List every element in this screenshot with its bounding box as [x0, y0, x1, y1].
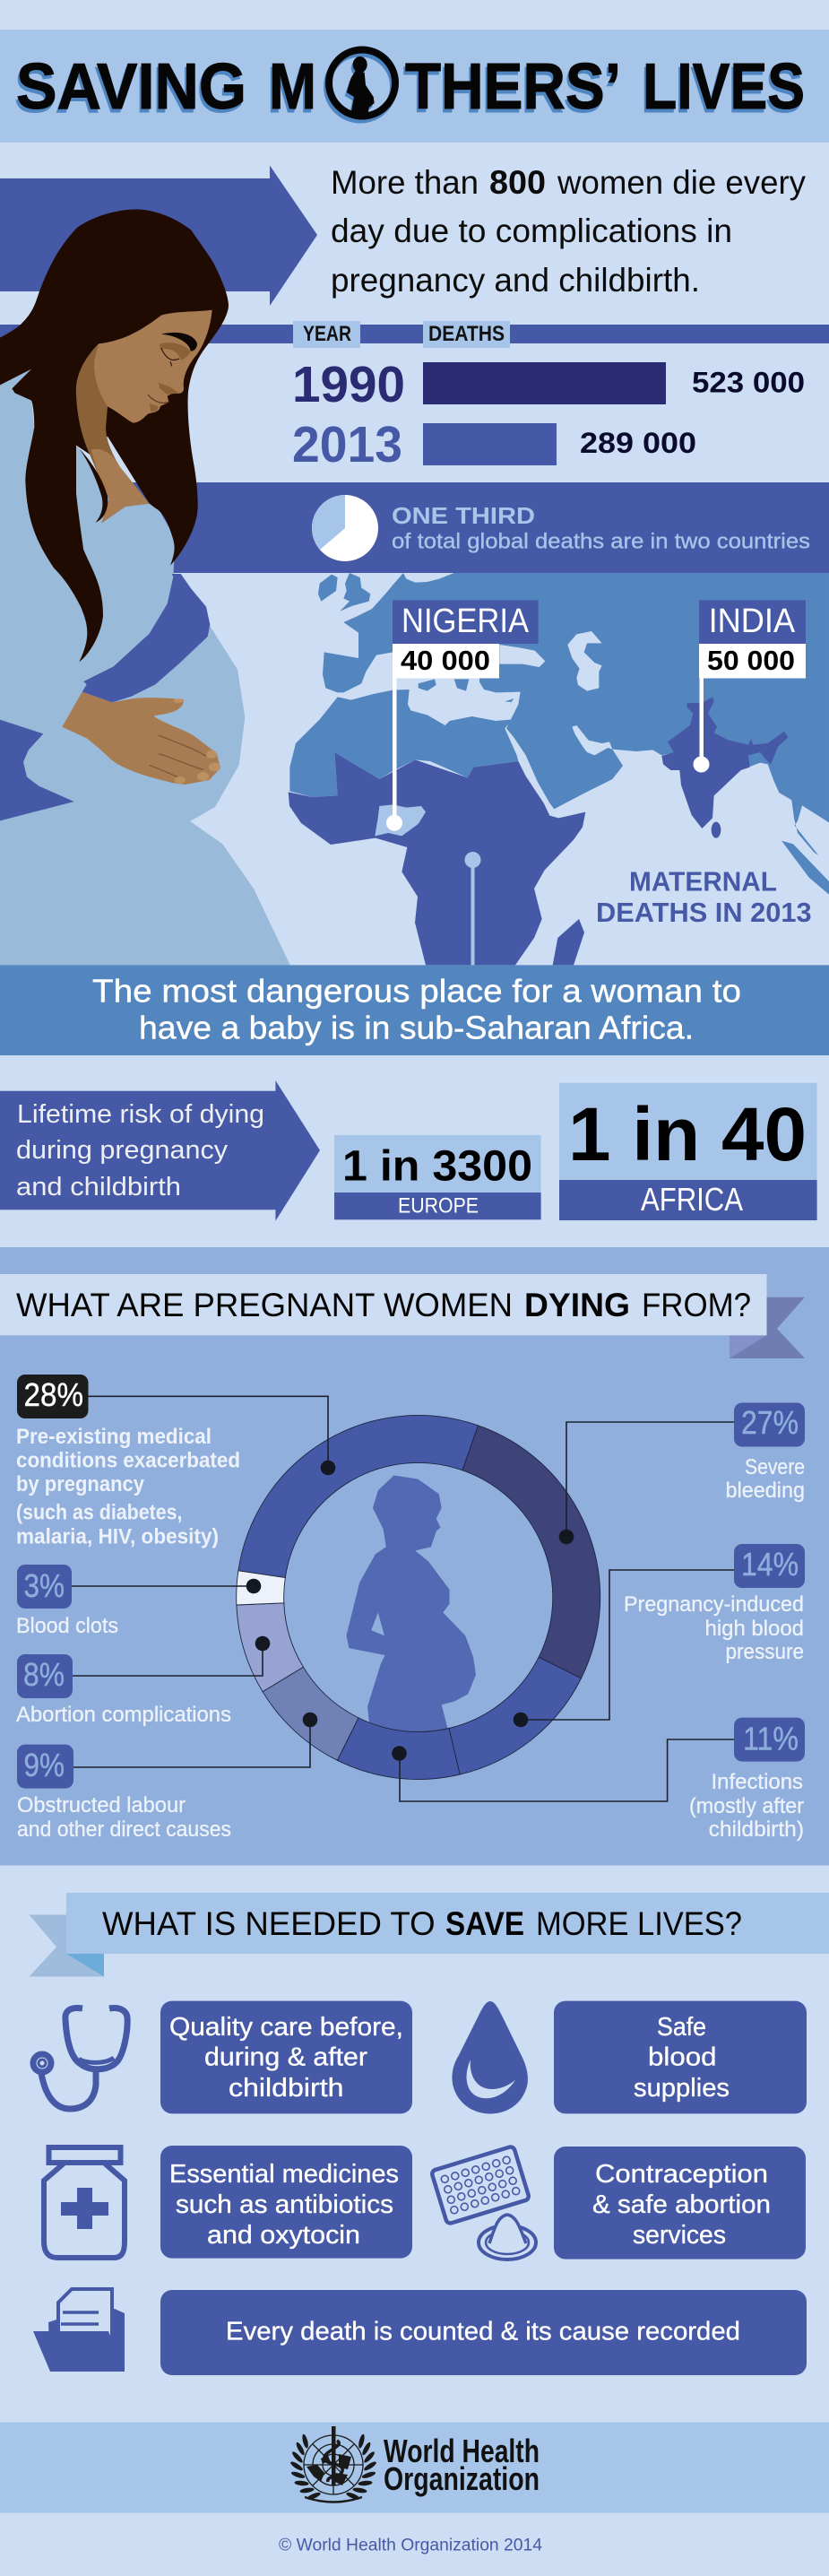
box: safe blood: Safe: [657, 2013, 706, 2042]
box: quality care: Quality care before,: [169, 2013, 403, 2042]
India callout: 50 000: [707, 645, 795, 676]
box: every death counted: [160, 2290, 807, 2375]
hair: [0, 209, 229, 662]
arrow: lifetime risk: Lifetime risk of dying: [17, 1100, 264, 1129]
callout: 14% high blood pressure: [514, 1544, 805, 1727]
British Isles: [318, 573, 370, 611]
Nigeria: [375, 804, 426, 836]
bar chart: deaths 1990 and 2013: [292, 356, 805, 473]
Italy, Greece and Cyprus: [419, 679, 514, 702]
WHO wordmark: World Health: [384, 2433, 540, 2469]
arrow: lifetime risk: during pregnancy: [16, 1136, 229, 1165]
callout: 27% severe bleeding: Severe: [745, 1455, 805, 1479]
icon: contraceptive pills and condom: [431, 2146, 536, 2259]
panel: one third band: [0, 482, 829, 573]
callout: 27% severe bleeding: 27%: [741, 1404, 799, 1441]
hair strand: [79, 448, 108, 523]
callout: 28% pre-existing conditions: malaria, HIV, obesity): [16, 1524, 219, 1548]
callout: 14% high blood pressure: 14%: [741, 1546, 799, 1583]
Sub-Saharan Africa: [289, 752, 585, 965]
callout: 11% infections: Infections: [712, 1770, 803, 1794]
silhouette of pregnant woman: [346, 1476, 476, 1735]
box: every death counted: Every death is counted & its cause recorded: [226, 2317, 740, 2346]
callout: 27% severe bleeding: [559, 1402, 805, 1544]
stat: Europe: 1 in 3300: [342, 1143, 532, 1191]
title: M: [269, 51, 316, 123]
pie chart: one third: [312, 495, 378, 561]
arrow: intro: [0, 165, 317, 306]
Nigeria callout: NIGERIA: [402, 603, 530, 640]
callout: 3% blood clots: [16, 1565, 261, 1638]
box: essential medicines: [160, 2146, 412, 2259]
intro text: women die every: [557, 164, 806, 201]
seas: [499, 631, 612, 755]
box: essential medicines: and oxytocin: [207, 2221, 360, 2250]
callout: 3% blood clots: Blood clots: [16, 1614, 118, 1638]
box: essential medicines: such as antibiotics: [176, 2190, 393, 2219]
callout: 28% pre-existing conditions: conditions exacerbated: [16, 1448, 240, 1472]
India callout: [694, 600, 806, 773]
heading band: [0, 1274, 767, 1335]
Sub-Saharan Africa pin: [464, 852, 480, 966]
sleeve cuff: [82, 574, 210, 702]
box: essential medicines: Essential medicines: [169, 2160, 399, 2189]
title: [16, 50, 805, 123]
bar chart: deaths 1990 and 2013: 2013: [292, 416, 402, 473]
callout: 9% obstructed labour: and other direct causes: [17, 1817, 231, 1842]
Nigeria callout: 40 000: [401, 645, 490, 676]
callout: 11% infections: [392, 1718, 805, 1842]
callout: 3% blood clots: 3%: [23, 1567, 65, 1604]
callout: 9% obstructed labour: Obstructed labour: [17, 1793, 186, 1817]
stat: Europe: [334, 1135, 541, 1219]
callout: 9% obstructed labour: 9%: [23, 1747, 65, 1783]
Madagascar: [553, 919, 584, 965]
callout: 14% high blood pressure: Pregnancy-induced: [624, 1592, 804, 1617]
copyright: © World Health Organization 2014: [279, 2537, 542, 2555]
year and deaths header strip: YEAR: [303, 322, 351, 346]
callout: 27% severe bleeding: bleeding: [726, 1479, 805, 1503]
box: contraception: services: [633, 2221, 726, 2250]
callout: 28% pre-existing conditions: (such as diabetes,: [16, 1501, 183, 1524]
arrow: lifetime risk: and childbirth: [16, 1173, 181, 1201]
panel: one third band: ONE THIRD: [392, 502, 535, 529]
box: contraception: [554, 2147, 806, 2259]
donut chart: [237, 1415, 600, 1779]
box: quality care: [160, 2001, 412, 2113]
bar chart: deaths 1990 and 2013: 1990: [292, 356, 405, 413]
panel: one third band: of total global deaths are in two countries: [392, 529, 810, 553]
icon: medicine bottle: [44, 2147, 125, 2258]
intro text: [331, 164, 806, 299]
banner: most dangerous place: The most dangerous place for a woman to: [92, 973, 741, 1010]
WHO wordmark: Organization: [384, 2460, 540, 2497]
face: [94, 310, 212, 423]
icon: stethoscope: [33, 2008, 127, 2109]
year and deaths header strip: [0, 321, 829, 348]
map caption: MATERNAL: [629, 866, 777, 897]
box: safe blood: blood: [648, 2043, 717, 2072]
intro text: More than: [331, 164, 479, 201]
callout: 28% pre-existing conditions: by pregnancy: [16, 1472, 145, 1496]
stat: Africa: 1 in 40: [568, 1092, 807, 1176]
callout: 11% infections: 11%: [743, 1720, 799, 1757]
banner: most dangerous place: have a baby is in sub-Saharan Africa.: [139, 1010, 694, 1045]
banner: most dangerous place: [0, 965, 829, 1055]
box: contraception: Contraception: [595, 2160, 768, 2189]
stat: Africa: [559, 1083, 817, 1220]
heading band: DYING: [524, 1287, 630, 1323]
bar chart: deaths 1990 and 2013: 523 000: [692, 366, 805, 398]
India callout: INDIA: [709, 603, 796, 640]
neck: [76, 343, 150, 523]
stat: Europe: EUROPE: [398, 1194, 479, 1219]
heading: what is needed: SAVE: [445, 1905, 524, 1942]
intro text: 800: [489, 164, 546, 201]
callout: 28% pre-existing conditions: Pre-existing medical: [16, 1425, 212, 1449]
title: LIVES: [643, 51, 805, 123]
callout: 8% abortion complications: 8%: [23, 1656, 65, 1693]
WHO emblem: [289, 2426, 377, 2502]
WHO wordmark: [384, 2433, 540, 2497]
illustration: pregnant woman: [0, 209, 290, 967]
Nigeria callout: [386, 600, 539, 831]
arrow: lifetime risk: [0, 1080, 320, 1221]
hand: [62, 692, 220, 785]
stat: Africa: AFRICA: [641, 1181, 743, 1218]
box: safe blood: supplies: [634, 2074, 730, 2103]
box: contraception: & safe abortion: [592, 2190, 771, 2219]
box: quality care: childbirth: [229, 2074, 344, 2103]
Europe, Asia and Middle East: [323, 573, 829, 855]
callout: 8% abortion complications: [16, 1636, 270, 1727]
ribbon: what is needed: [29, 1915, 104, 1976]
gap between arm and back: [0, 720, 74, 820]
panel: causes of death: [0, 1247, 829, 1865]
map caption: [596, 866, 812, 928]
heading: what is needed: MORE LIVES?: [536, 1905, 742, 1942]
title: SAVING: [16, 51, 246, 123]
heading band: WHAT ARE PREGNANT WOMEN: [16, 1287, 513, 1323]
North Africa: [289, 690, 518, 797]
callout: 28% pre-existing conditions: [16, 1375, 335, 1548]
title band: [0, 30, 829, 143]
callout: 9% obstructed labour: [17, 1713, 317, 1842]
heading: what is needed: WHAT IS NEEDED TO: [102, 1905, 436, 1942]
callout: 11% infections: (mostly after: [689, 1794, 804, 1818]
India: [661, 697, 788, 828]
callout: 14% high blood pressure: pressure: [726, 1640, 804, 1664]
box: safe blood: [554, 2001, 807, 2113]
icon: blood drop: [452, 2001, 528, 2114]
Sri Lanka: [712, 822, 721, 838]
year and deaths header strip: DEATHS: [428, 322, 505, 346]
ribbon: [730, 1297, 805, 1358]
intro text: day due to complications in: [331, 212, 732, 249]
title: THERS’: [405, 51, 621, 123]
callout: 8% abortion complications: Abortion complications: [16, 1703, 231, 1727]
dress: [0, 369, 290, 967]
map caption: DEATHS IN 2013: [596, 897, 812, 928]
box: quality care: during & after: [204, 2043, 367, 2072]
icon: folder with document: [33, 2289, 125, 2372]
heading band: FROM?: [642, 1287, 751, 1323]
callout: 11% infections: childbirth): [709, 1817, 804, 1842]
footer band: [0, 2423, 829, 2513]
Sumatra: [782, 841, 829, 895]
callout: 28% pre-existing conditions: 28%: [23, 1376, 83, 1413]
heading: what is needed: [66, 1893, 829, 1954]
bar chart: deaths 1990 and 2013: 289 000: [580, 427, 696, 459]
world map: [289, 573, 829, 965]
intro text: pregnancy and childbirth.: [331, 262, 700, 299]
callout: 14% high blood pressure: high blood: [704, 1617, 804, 1641]
